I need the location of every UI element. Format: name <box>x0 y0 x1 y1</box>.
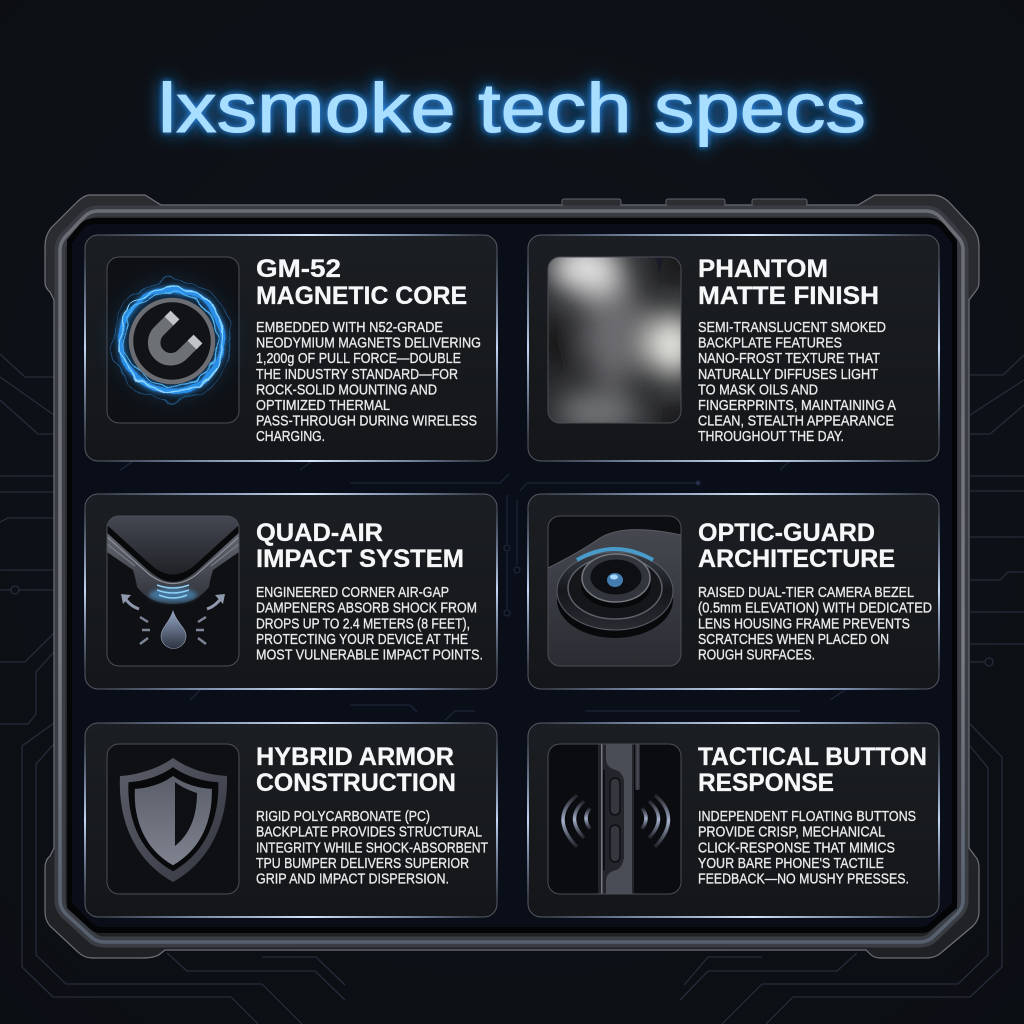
icon: frosted matte swatch <box>548 256 682 424</box>
description: PROTECTING YOUR DEVICE AT THE <box>256 632 468 648</box>
heading: RESPONSE <box>698 769 834 797</box>
description: TPU BUMPER DELIVERS SUPERIOR <box>256 856 469 872</box>
description: CLEAN, STEALTH APPEARANCE <box>698 414 894 430</box>
heading <box>256 743 456 797</box>
icon: floating side buttons with vibration waves <box>548 744 681 894</box>
description <box>698 320 896 445</box>
description: NEODYMIUM MAGNETS DELIVERING <box>256 336 481 352</box>
description: ROUGH SURFACES. <box>698 648 815 664</box>
description: RAISED DUAL-TIER CAMERA BEZEL <box>698 585 914 601</box>
description: TO MASK OILS AND <box>698 382 818 398</box>
description: ENGINEERED CORNER AIR-GAP <box>256 585 449 601</box>
description: BACKPLATE PROVIDES STRUCTURAL <box>256 825 482 841</box>
panel: GM-52 magnetic core <box>84 234 498 462</box>
description: RIGID POLYCARBONATE (PC) <box>256 809 430 825</box>
device frame <box>45 195 979 958</box>
icon: layered shield <box>107 744 239 894</box>
description: GRIP AND IMPACT DISPERSION. <box>256 872 449 888</box>
heading: PHANTOM <box>698 255 828 283</box>
description: OPTIMIZED THERMAL <box>256 398 390 414</box>
description: CLICK-RESPONSE THAT MIMICS <box>698 840 895 856</box>
heading: ARCHITECTURE <box>698 545 895 573</box>
icon: shock-absorbing corner <box>107 516 239 666</box>
heading: MATTE FINISH <box>698 282 879 310</box>
panel: optic-guard architecture <box>527 493 940 690</box>
description: INTEGRITY WHILE SHOCK-ABSORBENT <box>256 840 488 856</box>
heading <box>256 519 464 573</box>
description: THROUGHOUT THE DAY. <box>698 429 844 445</box>
description <box>256 585 483 664</box>
panel: phantom matte finish <box>527 234 940 462</box>
description: EMBEDDED WITH N52-GRADE <box>256 320 443 336</box>
description <box>698 585 932 664</box>
description: LENS HOUSING FRAME PREVENTS <box>698 616 910 632</box>
heading: CONSTRUCTION <box>256 769 456 797</box>
description: THE INDUSTRY STANDARD—FOR <box>256 367 458 383</box>
heading: TACTICAL BUTTON <box>698 743 927 771</box>
description: 1,200g OF PULL FORCE—DOUBLE <box>256 351 461 367</box>
heading: IMPACT SYSTEM <box>256 545 464 573</box>
description: BACKPLATE FEATURES <box>698 336 842 352</box>
icon: raised camera lens <box>548 516 681 666</box>
description <box>698 809 916 888</box>
heading: MAGNETIC CORE <box>256 282 467 310</box>
description: SEMI-TRANSLUCENT SMOKED <box>698 320 886 336</box>
description: NANO-FROST TEXTURE THAT <box>698 351 880 367</box>
description: DAMPENERS ABSORB SHOCK FROM <box>256 601 477 617</box>
description: FEEDBACK—NO MUSHY PRESSES. <box>698 872 909 888</box>
description: PASS-THROUGH DURING WIRELESS <box>256 414 477 430</box>
description: ROCK-SOLID MOUNTING AND <box>256 382 437 398</box>
heading <box>698 743 927 797</box>
description <box>256 320 481 445</box>
description: INDEPENDENT FLOATING BUTTONS <box>698 809 916 825</box>
heading: OPTIC-GUARD <box>698 519 875 547</box>
panel: tactical button response <box>527 722 940 918</box>
heading: HYBRID ARMOR <box>256 743 454 771</box>
icon: magnet with blue energy ring <box>107 257 239 423</box>
description: NATURALLY DIFFUSES LIGHT <box>698 367 878 383</box>
description: PROVIDE CRISP, MECHANICAL <box>698 825 885 841</box>
description: SCRATCHES WHEN PLACED ON <box>698 632 889 648</box>
description: YOUR BARE PHONE'S TACTILE <box>698 856 884 872</box>
description <box>256 809 488 888</box>
heading: QUAD-AIR <box>256 519 383 547</box>
description: DROPS UP TO 2.4 METERS (8 FEET), <box>256 616 470 632</box>
panel: quad-air impact system <box>84 493 498 690</box>
title: lxsmoke tech specs <box>158 69 866 147</box>
heading <box>698 519 895 573</box>
description: MOST VULNERABLE IMPACT POINTS. <box>256 648 483 664</box>
description: CHARGING. <box>256 429 325 445</box>
description: (0.5mm ELEVATION) WITH DEDICATED <box>698 601 932 617</box>
heading <box>256 255 467 310</box>
panel: hybrid armor construction <box>84 722 498 918</box>
heading: GM-52 <box>256 255 341 283</box>
description: FINGERPRINTS, MAINTAINING A <box>698 398 896 414</box>
heading <box>698 255 879 310</box>
